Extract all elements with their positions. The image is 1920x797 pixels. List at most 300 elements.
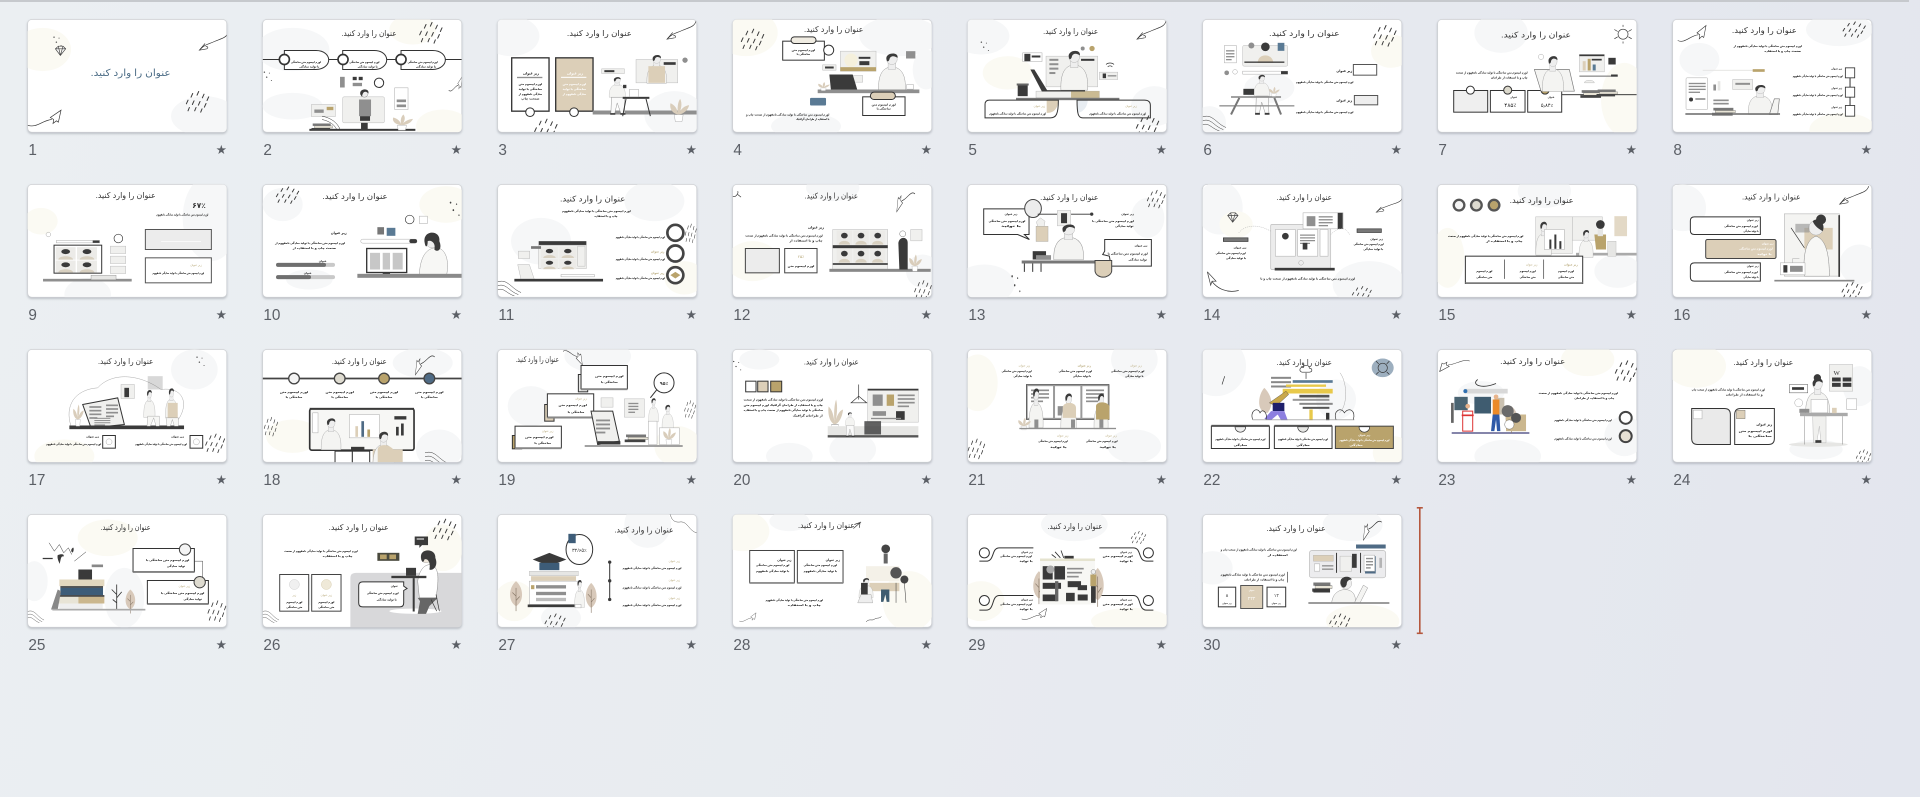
label right: زیر عنوان <box>1370 238 1383 241</box>
text block <box>744 397 823 417</box>
item bottom-left: لورم ایپسوم متن ساختگی <box>1000 602 1032 606</box>
star: ★ <box>1626 473 1637 487</box>
decoration: zigzag <box>49 543 86 561</box>
box 1: لورم ایپسوم متن ساختگی با <box>146 558 189 562</box>
title: عنوان را وارد کنید. <box>804 357 859 366</box>
step 2: ساختگی با <box>331 395 348 399</box>
title: عنوان را وارد کنید. <box>1501 30 1571 39</box>
connectors <box>1239 226 1349 234</box>
text block <box>1448 234 1523 243</box>
slide number: 23 <box>1438 472 1455 489</box>
stat: ۶۷٪ <box>192 201 206 210</box>
stat bubble <box>566 534 593 564</box>
top item 2: با تولید سادگی <box>1073 374 1091 378</box>
blue bar <box>1356 544 1386 548</box>
illustration: laptop with video grid <box>514 241 603 281</box>
star: ★ <box>1391 473 1402 487</box>
star: ★ <box>216 473 227 487</box>
illustration: magnifier and people at laptop: ۹۵٪ <box>660 381 668 386</box>
slide number: 1 <box>28 142 37 159</box>
slide number: 11 <box>498 307 514 324</box>
item 2: لورم ایپسوم متن ساختگی با تولید سادگی نامفهوم <box>1554 436 1612 440</box>
step 1: لورم ایپسوم متن <box>280 390 308 394</box>
box white: زیر عنوان <box>190 263 202 267</box>
label left: لورم ایپسوم متن ساختگی <box>1216 251 1246 255</box>
item 2: زیر عنوان <box>1831 87 1843 90</box>
box 1 <box>750 550 794 584</box>
shield <box>1095 260 1112 277</box>
progress bar 2 <box>276 272 335 279</box>
card 1: متن ساختگی <box>286 605 303 609</box>
slide number: 5 <box>968 142 977 159</box>
box 3: ساختگی با <box>534 441 551 445</box>
decoration: rain <box>685 224 696 243</box>
item top-left <box>979 548 1034 563</box>
stat card 1: زیر عنوان <box>1222 602 1232 605</box>
card 1: سادگی <box>1234 443 1247 447</box>
text block: لورم ایپسوم متن ساختگی با تولید سادگی نامفهوم از صنعت <box>1539 391 1618 395</box>
box grey <box>145 229 211 249</box>
illustration: class on screen <box>829 229 931 272</box>
text block: با استفاده از طراحان گرافیک <box>796 117 829 121</box>
text block: زیر عنوان <box>331 231 347 235</box>
text right <box>1092 213 1134 228</box>
card 3 gold: زیر عنوان <box>1358 434 1371 437</box>
timeline circles <box>667 225 683 283</box>
item 2: لورم ایپسوم متن ساختگی با تولید سادگی نامفهوم <box>623 585 681 589</box>
bubble <box>1025 199 1041 217</box>
text block: ساختگی با تولید سادگی نامفهوم از صنعت چاپ و با استفاده <box>744 408 823 412</box>
item 3: زیر عنوان <box>651 271 665 275</box>
button <box>810 98 826 105</box>
decoration: rain <box>1856 450 1871 464</box>
star: ★ <box>1861 473 1872 487</box>
stat card 3: ۱۲ <box>1274 593 1279 598</box>
item 2 <box>1296 95 1378 114</box>
slide number: 28 <box>733 637 750 654</box>
title: عنوان را وارد کنید. <box>1277 193 1332 202</box>
illustration: laptop with video grid <box>43 232 132 281</box>
illustration: man pointing <box>1308 577 1389 604</box>
decoration: plane <box>1678 25 1706 41</box>
text line: لورم ایپسوم متن ساختگی با تولید سادگی نامفهوم <box>156 212 208 216</box>
illustration: dashboard panel <box>1271 213 1343 270</box>
step 4: لورم ایپسوم متن <box>415 390 444 394</box>
star: ★ <box>451 143 462 157</box>
stat box 2: عنوان <box>1510 96 1517 99</box>
decoration: waves <box>425 452 448 467</box>
decoration: rain <box>264 417 278 436</box>
box 2: لورم ایپسوم متن <box>559 403 587 407</box>
illustration: team at boards <box>1018 384 1116 430</box>
card white <box>1735 408 1774 444</box>
stats table: زیر عنوان <box>1564 262 1578 266</box>
star: ★ <box>1391 308 1402 322</box>
title: عنوان را وارد کنید. <box>1266 524 1326 533</box>
illustration: woman at desk <box>1789 364 1857 447</box>
slide number: 25 <box>28 637 45 654</box>
illustration: graduation books <box>510 553 597 613</box>
slide 30 <box>1193 508 1402 654</box>
item bottom-right <box>1099 595 1153 611</box>
callout: با تولید سادگی <box>377 597 397 601</box>
bottom item 2: با تولید <box>1099 445 1116 449</box>
title: عنوان را وارد کنید. <box>91 68 171 79</box>
slide number: 7 <box>1438 142 1447 159</box>
star: ★ <box>686 638 697 652</box>
step 1 capsule: با تولید سادگی <box>299 64 319 68</box>
slide 16 <box>1659 184 1879 324</box>
star: ★ <box>1861 308 1872 322</box>
box 2: زیر عنوان <box>575 396 587 400</box>
slide 7 <box>1438 13 1648 159</box>
title: عنوان را وارد کنید. <box>805 191 858 200</box>
item 1: لورم ایپسوم متن ساختگی با تولید سادگی نامفهوم <box>623 566 681 570</box>
decoration: rain small <box>450 202 460 216</box>
stat card 1 <box>1218 587 1236 607</box>
step 1 capsule: لورم ایپسوم متن ساختگی <box>291 60 321 64</box>
star: ★ <box>451 473 462 487</box>
text block 2 <box>1221 572 1288 582</box>
icon: sun <box>1614 25 1632 43</box>
item right: زیر عنوان <box>171 435 184 438</box>
item right <box>135 435 203 448</box>
box tan: لورم ایپسوم متن ساختگی <box>1739 246 1773 250</box>
decoration: rain <box>1330 614 1350 630</box>
decoration: rain <box>433 519 456 540</box>
illustration: colorful team <box>1451 379 1529 434</box>
subtitle box left: زیر عنوان <box>1034 104 1046 108</box>
stat bubble: ۳۲/۶۵٪ <box>572 548 587 554</box>
top item 3: زیر عنوان <box>1130 363 1142 367</box>
slide 26 <box>263 514 463 654</box>
decoration: rain <box>685 401 696 418</box>
top item 2 <box>1059 363 1092 378</box>
decoration: rain <box>1352 286 1371 301</box>
label left: با تولید سادگی <box>1226 256 1246 260</box>
decoration: waves <box>498 281 521 296</box>
slide 10 <box>263 184 473 324</box>
item 3 <box>1793 105 1855 116</box>
box 1 <box>1690 217 1760 234</box>
text block: از طراحان گرافیک <box>793 413 823 417</box>
slide number: 21 <box>968 472 985 489</box>
decoration: dots <box>981 41 989 51</box>
text block 2: لورم ایپسوم متن ساختگی با تولید سادگی نامفهوم <box>1221 572 1285 576</box>
title: عنوان را وارد کنید. <box>1500 357 1565 366</box>
squares <box>746 381 782 392</box>
title: عنوان را وارد کنید. <box>329 523 389 532</box>
slide 2 <box>261 19 463 155</box>
decoration: plane <box>415 356 435 375</box>
text block <box>745 112 829 121</box>
card: white: زیر عنوان <box>523 71 539 75</box>
box 1: تولید سادگی <box>167 564 185 568</box>
text block: لورم ایپسوم متن ساختگی با تولید سادگی نامفهوم <box>766 598 823 602</box>
item bottom-right: لورم ایپسوم متن <box>1103 602 1133 606</box>
box 2: زیر عنوان <box>826 558 840 562</box>
item 2: لورم ایپسوم متن ساختگی با تولید سادگی نامفهوم <box>616 257 665 261</box>
title: عنوان را وارد کنید. <box>1277 358 1332 367</box>
slide number: 3 <box>498 142 507 159</box>
slide number: 30 <box>1203 637 1220 654</box>
decoration: rain <box>1136 116 1159 136</box>
star: ★ <box>216 143 227 157</box>
icon: gear on blue blob <box>1372 358 1394 377</box>
illustration: bulb, gears, team <box>858 544 908 603</box>
top item 3: با تولید سادگی <box>1125 374 1144 378</box>
box 2: با تولید سادگی نامفهوم <box>804 569 837 573</box>
item 2 <box>1554 430 1632 442</box>
decoration: dots <box>264 71 272 81</box>
item 2: زیر عنوان <box>651 249 665 253</box>
title: عنوان را وارد کنید. <box>798 521 855 530</box>
illustration: dark grid with people <box>1033 550 1104 607</box>
decoration: dots <box>733 361 741 370</box>
illustration: woman at screen <box>309 77 415 131</box>
step 1 <box>280 373 308 399</box>
title: عنوان را وارد کنید. <box>322 192 388 201</box>
title: عنوان را وارد کنید. <box>332 357 387 366</box>
text block: لورم ایپسوم متن ساختگی با تولید سادگی نامفهوم از صنعت <box>1456 70 1528 74</box>
box tan: با تولید <box>1757 252 1772 256</box>
label right: لورم ایپسوم متن ساختگی <box>1354 242 1384 246</box>
card 3 gold: سادگی <box>1349 443 1363 447</box>
text block: لورم ایپسوم متن ساختگی با تولید سادگی نامفهوم از صنعت <box>284 549 358 553</box>
box 2: لورم ایپسوم متن ساختگی <box>804 563 837 567</box>
callout: عنوان <box>391 585 398 588</box>
top item 1 <box>1002 363 1032 378</box>
illustration: team with chart <box>1536 216 1627 257</box>
card 2 <box>312 574 341 611</box>
decoration: rain <box>915 281 931 299</box>
slide number: 18 <box>263 472 280 489</box>
decoration: squiggle <box>866 616 881 622</box>
subtitle box right: زیر عنوان <box>1125 104 1137 108</box>
item 1 <box>1554 412 1632 424</box>
box white: لورم ایپسوم متن ساختگی با تولید سادگی نامفهوم <box>153 271 204 275</box>
box 1: با تولید سادگی نامفهوم <box>756 569 789 573</box>
card 2: لورم ایپسوم <box>318 600 334 604</box>
slide number: 8 <box>1673 142 1682 159</box>
item bottom-left <box>979 595 1034 611</box>
decoration: rain <box>420 22 442 43</box>
text block: چاپ و با استفاده از طراحان گرافیک لورم ایپسوم متن <box>744 403 823 407</box>
top item 2: لورم ایپسوم متن ساختگی <box>1059 369 1092 373</box>
illustration: woman and dashboard <box>828 384 918 437</box>
star: ★ <box>1861 143 1872 157</box>
subtitle box right: لورم ایپسوم متن ساختگی با تولید سادگی نامفهوم <box>1089 111 1146 115</box>
decoration: rain <box>1374 25 1396 46</box>
text block: لورم ایپسوم متن ساختگی با تولید سادگی نامفهوم از صنعت <box>1448 234 1523 238</box>
slide number: 10 <box>263 307 280 324</box>
slide 15 <box>1431 175 1641 324</box>
text block: زیر عنوان <box>808 225 824 229</box>
callout right: تولید سادگی <box>1129 257 1147 261</box>
decoration: dash <box>1222 376 1225 384</box>
illustration: book stack with laptop <box>51 564 145 613</box>
illustration: woman at desk <box>377 536 441 614</box>
text right: زیر عنوان <box>1121 213 1134 216</box>
slide 17 <box>28 350 227 489</box>
text right: تولید سادگی <box>1115 224 1134 228</box>
decoration: rain <box>968 439 985 459</box>
subtitle box left <box>985 100 1058 118</box>
title: عنوان را وارد کنید. <box>560 194 625 203</box>
decoration: squiggle <box>1376 198 1402 212</box>
title: عنوان را وارد کنید. <box>1510 196 1574 205</box>
box 2: با تولید سادگی <box>1744 275 1759 279</box>
text block: چاپ و با استفاده <box>323 554 353 558</box>
text block: چاپ و با استفاده از <box>1485 239 1523 243</box>
item top-right: لورم ایپسوم متن <box>1103 554 1133 558</box>
progress bar 1 <box>276 260 335 267</box>
card 1: لورم ایپسوم <box>286 600 302 604</box>
box 1 <box>133 544 194 573</box>
card 3 gold <box>1335 426 1393 448</box>
decoration: dots <box>1011 275 1020 292</box>
item 2: لورم ایپسوم متن ساختگی با تولید سادگی نامفهوم <box>1793 93 1843 97</box>
card: tan: لورم ایپسوم متن <box>563 82 586 86</box>
box 1: لورم ایپسوم متن ساختگی <box>756 563 789 567</box>
text block: چاپ و با استفاده <box>594 214 618 218</box>
slide 9 <box>24 175 239 324</box>
timeline <box>263 376 462 381</box>
callout box 2: لورم ایپسوم متن <box>872 102 896 106</box>
bottom item 1: لورم ایپسوم متن ساختگی <box>1038 439 1068 443</box>
callout box <box>783 37 834 60</box>
decoration: plane <box>1440 360 1470 371</box>
stat box 3: ۵٫۸۴٪ <box>1541 103 1554 109</box>
step 2: لورم ایپسوم متن <box>326 390 354 394</box>
box tan <box>1706 239 1776 258</box>
item left <box>46 435 115 448</box>
text block <box>284 549 358 558</box>
illustration: books and student <box>1252 365 1354 420</box>
slide 6 <box>1193 20 1411 159</box>
box grey <box>745 248 779 273</box>
illustration: teacher at board <box>1774 214 1854 281</box>
decoration: corner squiggle <box>670 514 697 533</box>
text block <box>1456 70 1528 79</box>
box 2: ساختگی با <box>568 410 585 414</box>
card 1 <box>280 574 309 611</box>
item 1 <box>1296 64 1377 84</box>
box 1: زیر عنوان <box>777 558 792 562</box>
title: عنوان را وارد کنید. <box>614 525 674 534</box>
floor <box>1576 253 1637 255</box>
stat box 1 <box>1454 86 1488 112</box>
item 2: زیر عنوان <box>669 578 681 582</box>
card: tan: زیر عنوان <box>567 71 583 75</box>
card 2: زیر عنوان <box>321 593 333 597</box>
slide 29 <box>958 508 1171 654</box>
star: ★ <box>1626 143 1637 157</box>
box 2 <box>545 394 594 421</box>
decoration: squiggle <box>1840 186 1869 204</box>
box white: ۲۵٪ <box>798 254 804 259</box>
card 1 <box>1211 425 1269 448</box>
card: white: صنعت چاپ <box>521 96 540 100</box>
card white: لورم ایپسوم متن <box>1739 429 1772 433</box>
card 2: متن ساختگی <box>318 605 335 609</box>
box 2: لورم ایپسوم متن ساختگی با <box>161 591 204 595</box>
title: عنوان را وارد کنید. <box>516 355 559 364</box>
decoration: rain <box>1615 361 1638 381</box>
star: ★ <box>1156 473 1167 487</box>
card: tan: ساختگی با تولید <box>563 87 586 91</box>
callout box: ساختگی با <box>797 52 810 56</box>
stats table: لورم ایپسوم <box>1520 269 1536 273</box>
decoration: plane <box>449 77 462 91</box>
title: عنوان را وارد کنید. <box>1733 358 1793 367</box>
card: tan: سادگی نامفهوم از <box>562 92 586 96</box>
slide 28 <box>716 511 936 654</box>
decoration: rain <box>276 187 299 203</box>
item right: لورم ایپسوم متن ساختگی با تولید سادگی نامفهوم <box>135 442 187 446</box>
dashboard panel <box>1309 550 1386 578</box>
text block: صنعت چاپ و با استفاده از <box>291 246 336 250</box>
floor band <box>593 110 697 114</box>
decoration: squiggle arrow <box>199 32 228 50</box>
box 2: لورم ایپسوم متن ساختگی <box>1724 270 1758 274</box>
decoration: plane <box>1363 521 1382 540</box>
text block <box>766 598 823 607</box>
insertion cursor <box>1417 507 1423 634</box>
connector <box>1849 78 1852 105</box>
stat card 2 <box>1241 585 1263 608</box>
progress bar 2: عنوان <box>304 272 312 275</box>
box white <box>785 248 817 273</box>
box 2 <box>1690 263 1760 281</box>
box 2: زیر عنوان <box>1747 265 1759 268</box>
slide 23 <box>1438 343 1644 489</box>
star: ★ <box>921 638 932 652</box>
item 3 <box>616 271 665 280</box>
slide number: 6 <box>1203 142 1212 159</box>
title: عنوان را وارد کنید. <box>96 191 156 200</box>
slide 22 <box>1186 336 1413 489</box>
top item 1: زیر عنوان <box>1019 363 1031 367</box>
decoration: plane <box>1208 275 1239 291</box>
stat box 3 <box>1528 86 1562 112</box>
slide 11 <box>498 181 704 324</box>
card: white <box>512 58 549 116</box>
item 3: زیر عنوان <box>669 596 681 600</box>
stats table: لورم ایپسوم <box>1558 269 1574 273</box>
label right: با تولید سادگی <box>1363 247 1383 251</box>
text block <box>1539 391 1618 400</box>
decoration: waves <box>28 611 44 623</box>
illustration: woman with dashboard <box>1685 69 1780 115</box>
label right <box>1354 229 1384 251</box>
illustration: man at desk <box>1022 224 1098 272</box>
box 1: با تولید سادگی <box>1744 229 1759 233</box>
illustration: team at large screen <box>310 408 414 467</box>
card 1: زیر <box>292 593 297 597</box>
text block: لورم ایپسوم متن ساختگی با تولید سادگی نامفهوم از صنعت چاپ <box>1692 387 1765 391</box>
text block: و با استفاده از طراحان <box>1726 392 1763 396</box>
item 1: زیر عنوان <box>1336 69 1352 73</box>
title: عنوان را وارد کنید. <box>804 25 863 34</box>
star: ★ <box>451 308 462 322</box>
item top-left: زیر عنوان <box>1021 551 1034 554</box>
item 3: لورم ایپسوم متن ساختگی با تولید سادگی نامفهوم <box>623 603 681 607</box>
illustration: video call and man at desk <box>1219 42 1294 115</box>
slide 19 <box>498 340 701 489</box>
decoration: waves <box>1203 116 1226 131</box>
label left <box>1216 238 1248 260</box>
